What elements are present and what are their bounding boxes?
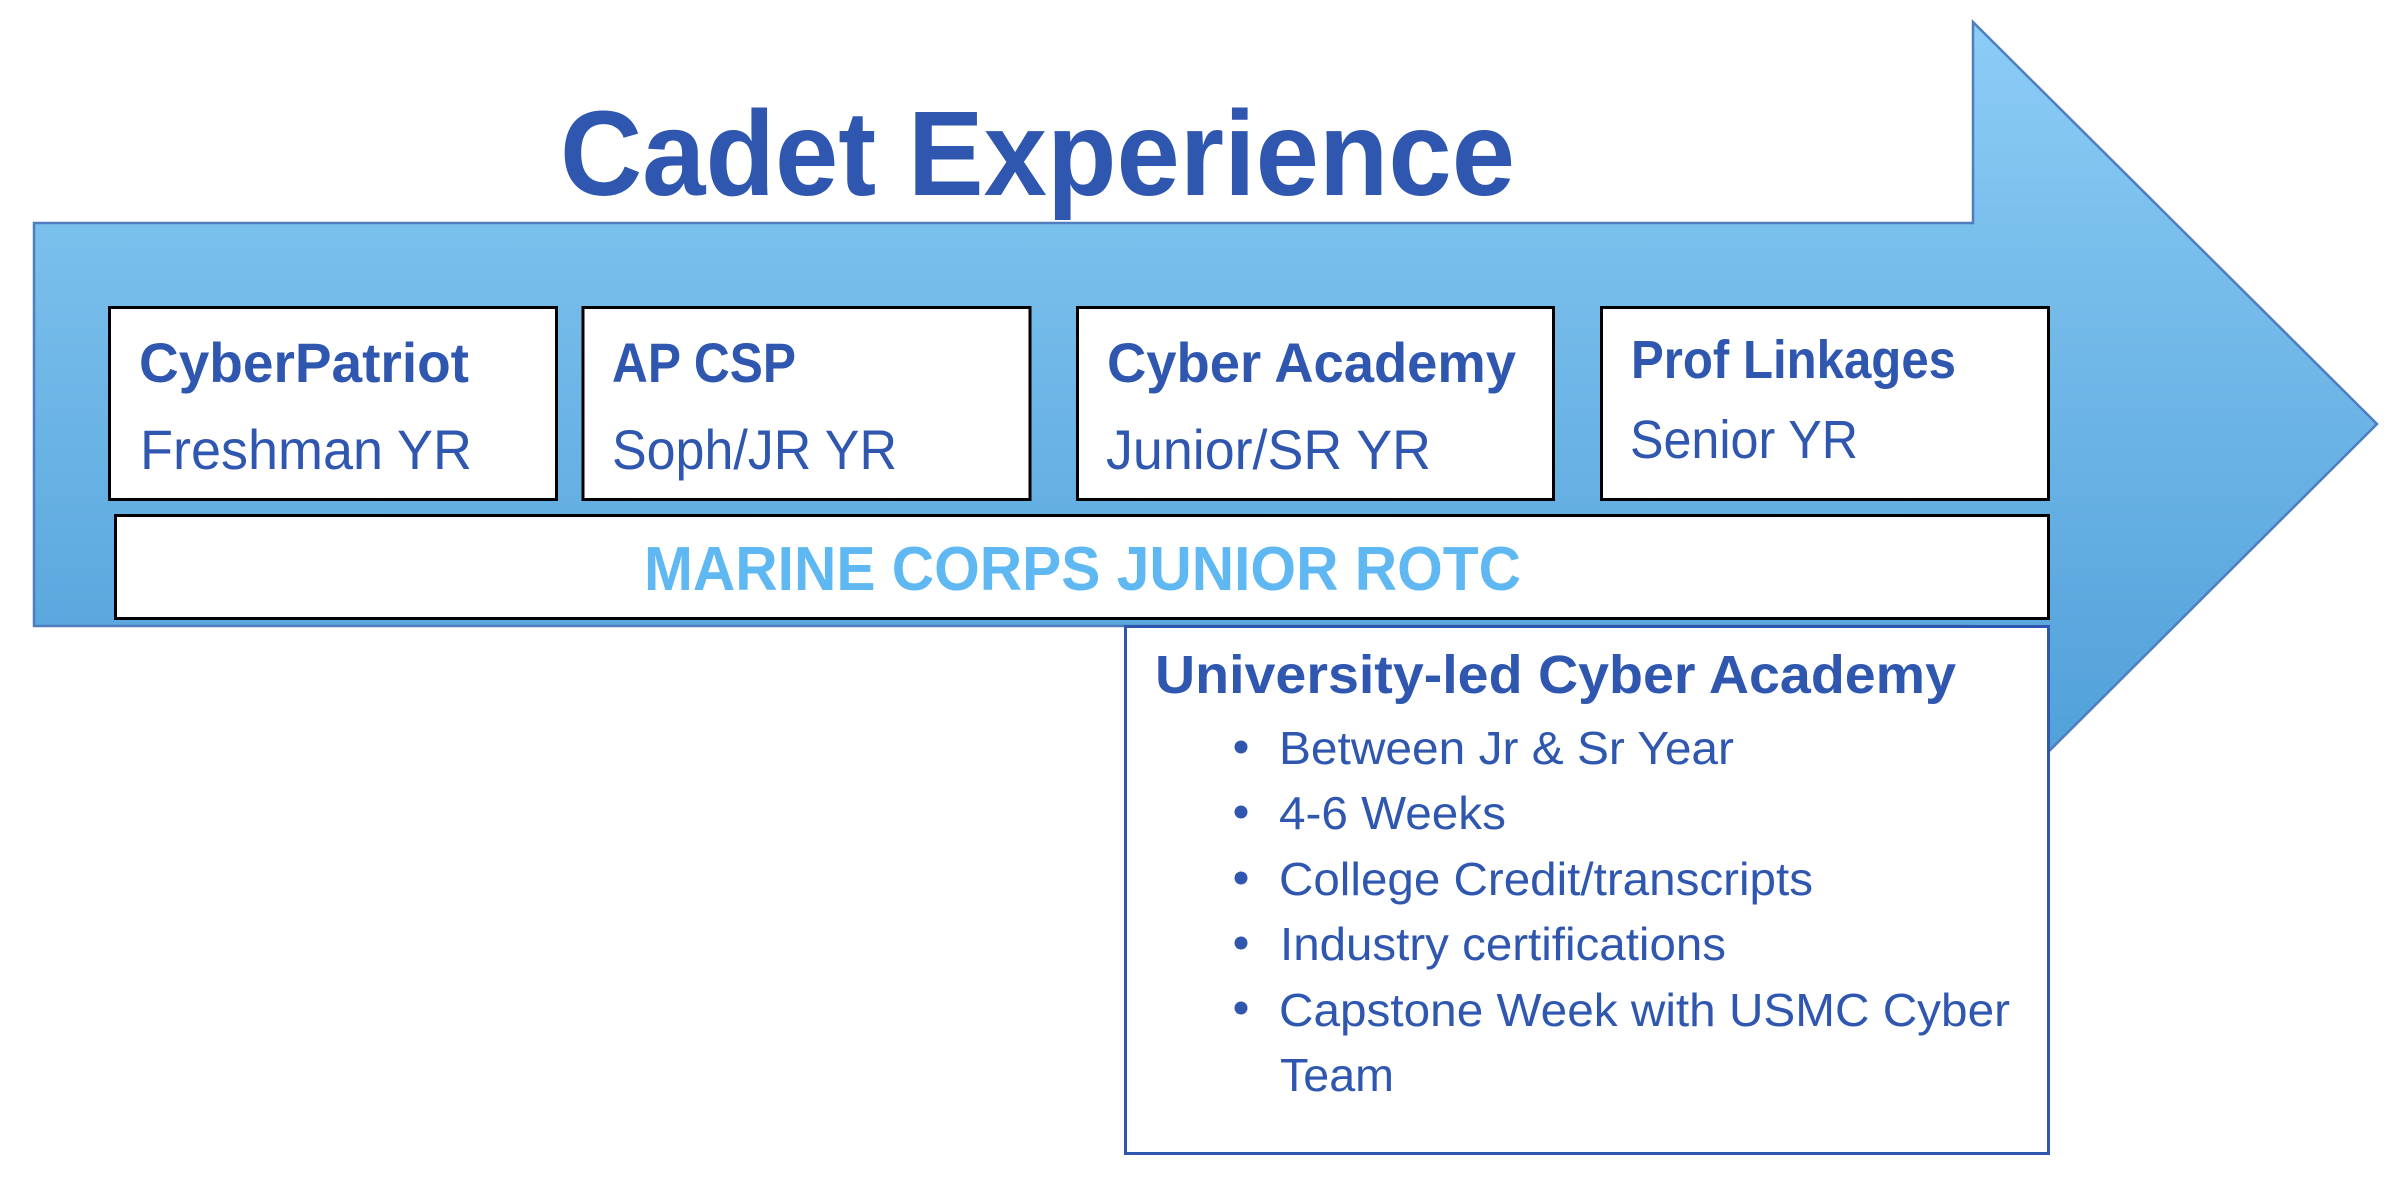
panel: University-led Cyber Academy xyxy=(1126,626,2048,1154)
text: Junior/SR YR: Junior/SR YR xyxy=(1106,418,1431,481)
heading: University-led Cyber Academy: University-led Cyber Academy xyxy=(1155,645,1956,705)
bullet list: College Credit/transcripts xyxy=(1279,853,1813,905)
panel: Marine Corps Junior ROTC banner xyxy=(116,516,2048,618)
bullet list: Capstone Week with USMC Cyber xyxy=(1279,984,2010,1036)
panel: Prof Linkages xyxy=(1602,308,2048,500)
banner text: MARINE CORPS JUNIOR ROTC xyxy=(644,535,1521,604)
panel: AP CSP xyxy=(583,308,1030,500)
bullet list: Team xyxy=(1280,1049,1394,1101)
panel: Cyber Academy xyxy=(1078,308,1554,500)
arrow: bent-up progression arrow xyxy=(34,22,2377,827)
title: Cadet Experience xyxy=(560,85,1515,221)
heading: Cyber Academy: Cyber Academy xyxy=(1107,331,1516,394)
text: Freshman YR: Freshman YR xyxy=(140,418,472,481)
bullet list xyxy=(1234,722,2010,1101)
bullet list: Industry certifications xyxy=(1280,918,1726,970)
panel: CyberPatriot xyxy=(110,308,556,500)
heading: AP CSP: AP CSP xyxy=(612,331,796,394)
bullet list: Between Jr & Sr Year xyxy=(1279,722,1734,774)
text: Senior YR: Senior YR xyxy=(1630,410,1858,470)
text: Soph/JR YR: Soph/JR YR xyxy=(612,418,897,481)
bullet list: 4-6 Weeks xyxy=(1279,787,1506,839)
heading: Prof Linkages: Prof Linkages xyxy=(1631,330,1956,390)
heading: CyberPatriot: CyberPatriot xyxy=(139,331,469,394)
